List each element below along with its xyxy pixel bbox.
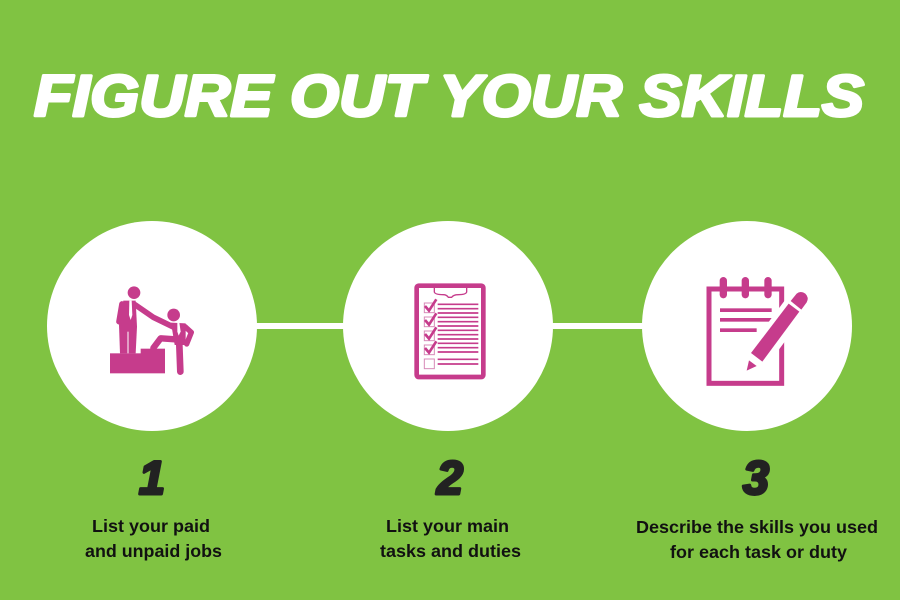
step 1 text — [85, 516, 222, 561]
number 3: 3 — [743, 451, 769, 504]
connector line — [250, 323, 650, 329]
step 1 text: List your paid — [92, 516, 210, 536]
step 2 text: tasks and duties — [380, 541, 521, 561]
step 2 text: List your main — [386, 516, 509, 536]
title: FIGURE OUT YOUR SKILLS — [34, 64, 864, 129]
icon: notepad and pencil — [709, 277, 814, 383]
icon: clipboard checklist — [417, 286, 483, 377]
step 3 text — [636, 517, 878, 562]
step 3 text: for each task or duty — [670, 542, 847, 562]
step 3 circle — [642, 221, 852, 431]
step 3 text: Describe the skills you used — [636, 517, 878, 537]
step 2 text — [380, 516, 521, 561]
step 1 text: and unpaid jobs — [85, 541, 222, 561]
icon: helping hand up steps — [110, 286, 191, 373]
step 1 circle — [47, 221, 257, 431]
step 2 circle — [343, 221, 553, 431]
number 2: 2 — [436, 451, 463, 504]
number 1: 1 — [139, 451, 165, 504]
